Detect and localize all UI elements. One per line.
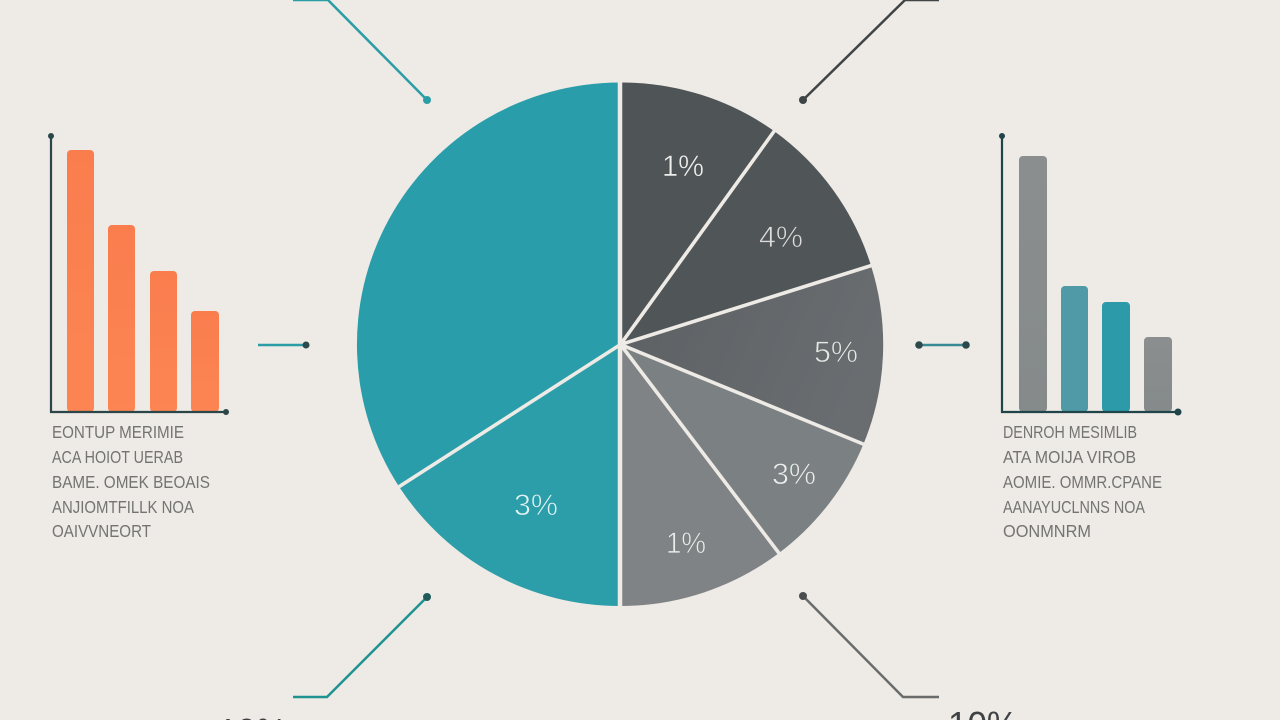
bar 1 [1019,156,1047,412]
pie slice: light grey 3% [620,344,864,553]
text block: right caption: DENROH MESIMLIB [1003,422,1137,442]
text block: right caption: ATA MOIJA VIROB [1003,447,1136,467]
connector: right [915,341,970,349]
axes [1002,136,1178,412]
bar 4 [191,311,219,412]
text block: right caption: AANAYUCLNNS NOA [1003,497,1145,517]
pie slice: dark 4% [620,131,871,344]
pie label: 1% grey: 1% [666,527,706,560]
leader line: bottom right [799,592,939,697]
text block: right caption [1003,422,1162,541]
pie label: 4%: 4% [759,221,803,254]
pie slice: dark top 1% [620,82,774,345]
pie slice: bottom teal 3% [399,344,620,606]
leader line: top left [293,0,431,104]
leader line: top right [799,0,939,104]
bar 3 [1102,302,1130,412]
pie label: 3% grey: 3% [772,458,816,491]
bar 3 [150,271,177,412]
pie label: 5%: 5% [814,336,858,369]
pie slice: grey 5% [620,266,883,444]
text block: left caption [52,422,210,541]
bar 2 [108,225,135,412]
text block: left caption: ANJIOMTFILLK NOA [52,497,194,517]
pie label: top dark slice: 1% [662,150,704,183]
bar 4 [1144,337,1172,412]
pie slice: light grey 1% [620,344,779,606]
text block: left caption: ACA HOIOT UERAB [52,447,183,467]
text block: left caption: OAIVVNEORT [52,521,151,541]
text block: right caption: AOMIE. OMMR.CPANE [1003,472,1162,492]
text block: right caption: OONMNRM [1003,521,1091,541]
bar 2 [1061,286,1088,412]
text block: left caption: BAME. OMEK BEOAIS [52,472,210,492]
bar chart: right grey and teal [999,133,1182,416]
text block: left caption: EONTUP MERIMIE [52,422,184,442]
leader line: bottom left [293,593,431,697]
pie label: 3% teal: 3% [514,489,558,522]
pie slice: large teal [357,82,620,487]
bar chart: left orange [48,133,229,415]
axes [51,136,226,412]
connector: left [258,342,310,348]
bar 1 [67,150,94,412]
pie chart [357,80,883,608]
